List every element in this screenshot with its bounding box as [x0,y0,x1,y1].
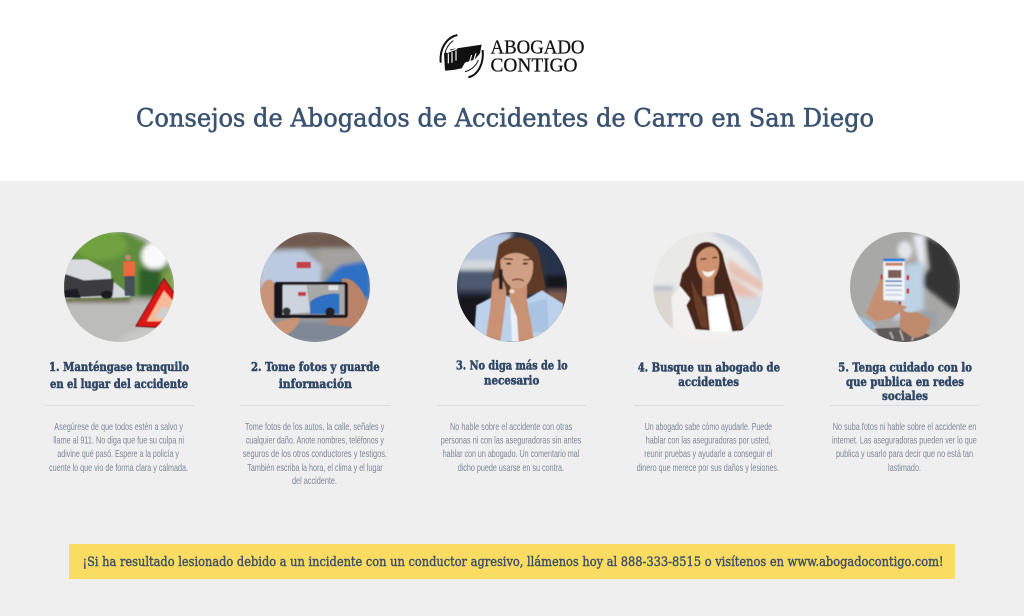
body text: Tome fotos de los autos, la calle, señales y [245,422,385,433]
heading: información [279,376,352,391]
body text [49,422,188,474]
body text: adivine qué pasó. Espere a la policía y [57,449,180,460]
body text: También escriba la hora, el clima y el lugar [247,463,383,474]
heading: 3. No diga más de lo [456,358,568,372]
body text: seguros de los otros conductores y testigos. [243,449,387,460]
heading [456,358,568,388]
panel: step 5 [830,232,980,474]
body text [637,422,779,474]
body text: No hable sobre el accidente con otras [450,422,572,433]
heading [251,359,380,391]
panel: step 4 [634,232,784,474]
heading: necesario [484,372,539,388]
heading: 5. Tenga cuidado con lo [838,359,972,374]
body text: dicho puede usarse en su contra. [458,463,564,474]
heading: sociales [882,388,928,403]
body text: del accidente. [292,476,337,487]
logo wordmark: ABOGADO [490,38,584,58]
heading: 2. Tome fotos y guarde [251,359,380,374]
photo: hands holding phone with social media feed [850,232,960,344]
photo: smiling attorney in white blazer [653,232,763,343]
body text: Asegúrese de que todos estén a salvo y [54,422,184,433]
panel: step 1 [44,230,194,474]
body text: cualquier daño. Anote nombres, teléfonos y [246,436,385,446]
heading: 4. Busque un abogado de [638,359,780,374]
body text: personas ni con las aseguradoras sin antes [441,436,581,446]
body text [832,422,977,474]
body text: Un abogado sabe cómo ayudarle. Puede [645,422,772,433]
heading [838,359,972,403]
body text [243,422,387,487]
heading [49,359,189,391]
logo wordmark: CONTIGO [490,56,578,77]
panel: step 2 [240,232,390,487]
logo wordmark [490,38,584,77]
panel: step 3 [437,232,586,474]
heading: 1. Manténgase tranquilo [49,359,189,374]
icon: joined hands [441,35,483,77]
body text: llame al 911. No diga que fue su culpa ni [53,436,184,446]
heading: en el lugar del accidente [50,376,188,391]
heading [638,359,780,389]
body text: reunir pruebas y ayudarle a conseguir el [644,449,772,460]
photo: worried woman on phone [457,232,567,342]
logo [441,35,584,77]
body text: cuente lo que vio de forma clara y calmada. [49,463,188,474]
photo: hands photographing crash with phone [260,232,370,342]
body text [441,422,581,474]
heading: accidentes [678,374,739,389]
body text: dinero que merece por sus daños y lesiones. [637,463,779,474]
body text: hablar con las aseguradoras por usted, [646,436,771,446]
heading: que publica en redes [846,374,964,389]
title: Consejos de Abogados de Accidentes de Carro en San Diego [136,104,874,134]
photo: car accident with warning triangle [64,230,179,342]
callout banner [69,544,955,579]
body text: hablar con un abogado. Un comentario mal [443,449,579,460]
body text: lastimado. [888,463,921,474]
